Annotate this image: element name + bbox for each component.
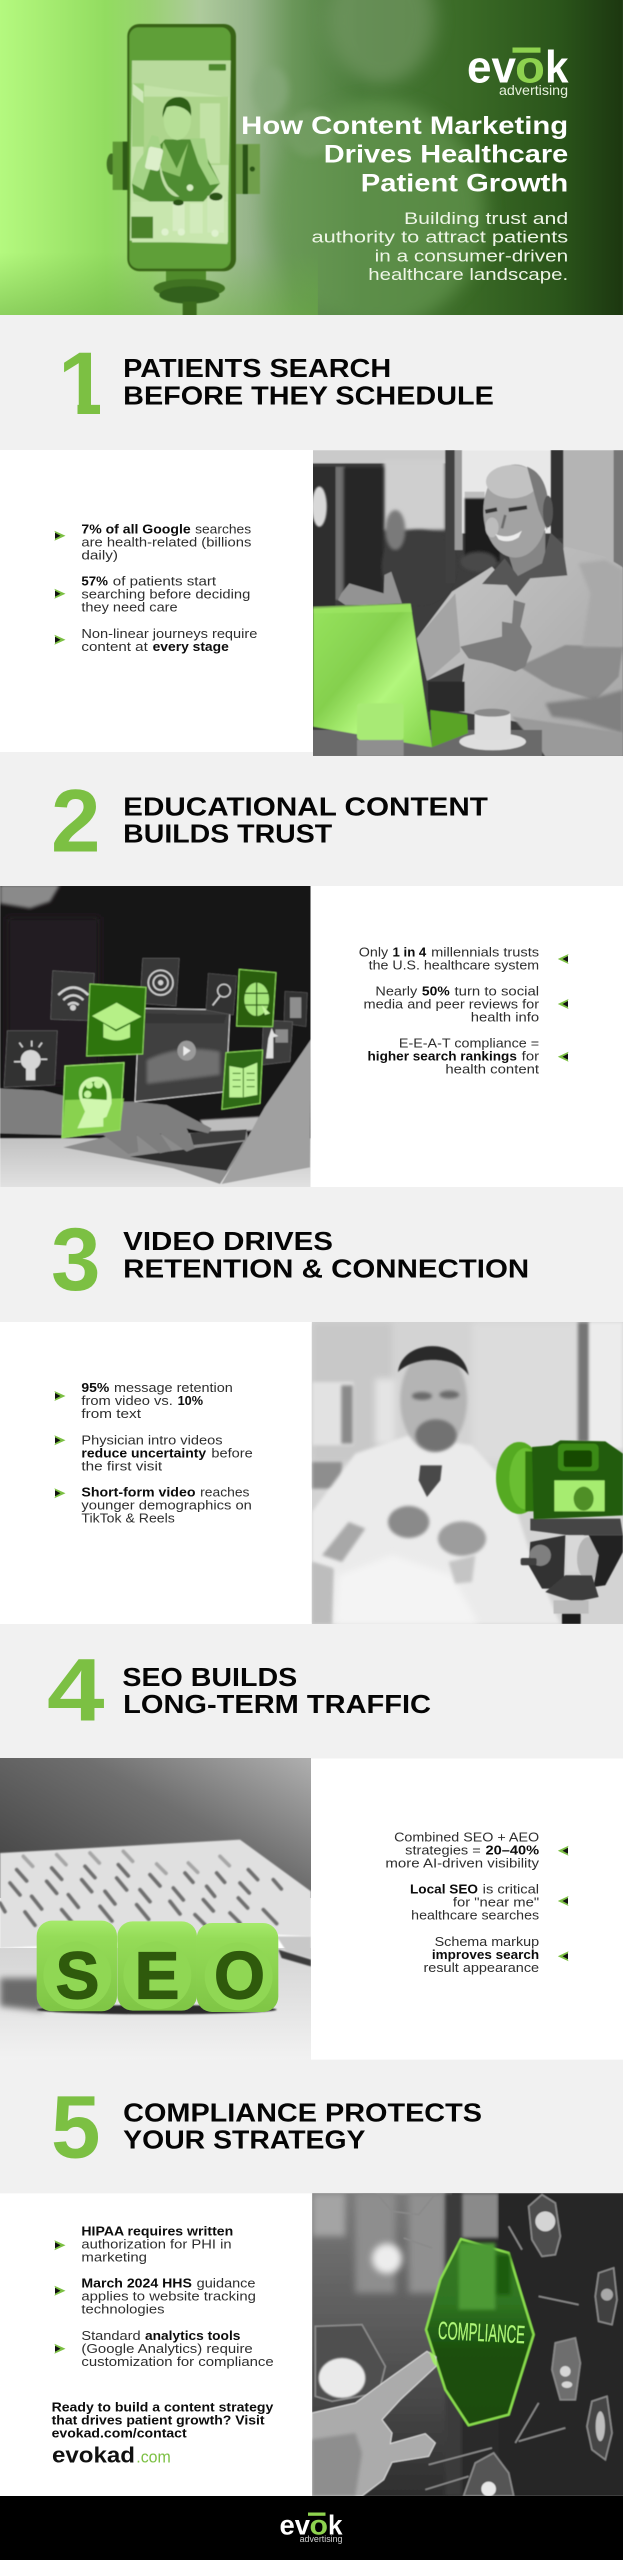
bullet 1.2: of patients start <box>113 574 217 589</box>
number 5: 5 <box>51 2076 100 2176</box>
bullet 1.1 <box>54 521 252 562</box>
hero subtitle: healthcare landscape. <box>368 265 568 284</box>
dark chair gap <box>428 682 465 712</box>
icon: head with gears <box>62 1063 124 1138</box>
bullet 3.2: reduce uncertainty <box>81 1445 207 1460</box>
bullet 3.1: 10% <box>178 1393 203 1408</box>
icon: wifi <box>51 971 94 1021</box>
phone screen <box>130 61 231 244</box>
bullet 4.3: Schema markup <box>435 1934 539 1949</box>
dice shadow <box>37 2005 277 2014</box>
bullet 2.2: media and peer reviews for <box>364 996 540 1011</box>
background tech shapes <box>315 2194 617 2496</box>
website wordmark <box>52 2443 171 2468</box>
bullet 3.2: before <box>211 1445 253 1460</box>
bullet 3.3 <box>54 1485 252 1526</box>
glass <box>357 703 404 740</box>
bullet 4.3 <box>424 1934 568 1975</box>
man sweater <box>417 547 623 756</box>
bullet 3.2 <box>54 1432 253 1473</box>
bullet 2.2: turn to social <box>454 983 539 998</box>
panel 4: text bullets <box>385 1829 568 1975</box>
hero subtitle: in a consumer-driven <box>375 246 568 265</box>
bullet 4.2: Local SEO <box>410 1882 478 1897</box>
phone stand <box>154 270 225 317</box>
bullet 4.2 <box>410 1882 568 1923</box>
open right hand <box>460 600 532 672</box>
bullet 5.2: March 2024 HHS <box>81 2276 192 2291</box>
green camera <box>496 1440 623 1519</box>
SEO lettering on dice: O <box>214 1938 265 2014</box>
bullet 2.3 <box>368 1036 568 1077</box>
laptop screen back <box>222 1039 311 1184</box>
icon: target <box>140 958 179 1006</box>
bullet 5.3: analytics tools <box>145 2328 240 2343</box>
bullet 2.2 <box>364 983 568 1024</box>
bullet 4.1: Combined SEO + AEO <box>394 1829 539 1844</box>
panel 1: photo of older man at green laptop <box>312 450 623 757</box>
panel 2: photo of hands on laptop with floating icons <box>0 883 313 1190</box>
panel 5: photo of finger pressing compliance hexagon <box>312 2193 623 2496</box>
bullet 2.1: the U.S. healthcare system <box>369 957 539 972</box>
hero subtitle: Building trust and <box>404 209 568 228</box>
section 3 header band <box>0 1187 623 1322</box>
bullet 3.3: TikTok & Reels <box>81 1511 175 1526</box>
SEO lettering on dice: E <box>134 1938 180 2014</box>
bullet 1.3 <box>54 626 257 654</box>
bullet 3.3: younger demographics on <box>81 1498 252 1513</box>
bullet 4.1: 20–40% <box>486 1842 540 1857</box>
icon: document <box>284 991 307 1027</box>
heading 3: RETENTION & CONNECTION <box>123 1253 529 1283</box>
SEO lettering on dice: S <box>56 1938 100 2014</box>
green laptop <box>313 604 432 747</box>
bullet 2.1 <box>359 944 568 972</box>
necktie <box>419 1465 442 1497</box>
bullet 1.3: content at <box>81 639 148 654</box>
footer bar <box>0 2496 623 2560</box>
hero banner <box>0 0 623 327</box>
panel 4: photo of SEO dice and keyboard <box>0 1758 313 2061</box>
call to action: evokad.com/contact <box>52 2425 187 2440</box>
bullet 1.3: every stage <box>153 639 229 654</box>
heading 4 <box>122 1662 431 1719</box>
head <box>483 464 547 558</box>
number 2: 2 <box>51 771 100 871</box>
hexagon lettering: COMPLIANCE <box>437 2317 526 2349</box>
bullet 2.3: for <box>522 1049 540 1064</box>
number 4: 4 <box>47 1640 105 1740</box>
bullet 4.2: healthcare searches <box>411 1908 540 1923</box>
hero title: Drives Healthcare <box>324 141 568 169</box>
bullet 5.2: applies to website tracking <box>81 2289 256 2304</box>
logo: evok advertising: k <box>545 42 569 92</box>
tripod <box>521 1519 623 1624</box>
footer logo: o <box>310 2509 328 2540</box>
website wordmark: evokad <box>52 2443 135 2468</box>
logo: evok advertising: ev <box>467 42 516 92</box>
number 1: 1 <box>58 333 108 433</box>
bullet 4.1: more AI-driven visibility <box>385 1856 540 1871</box>
bullet 3.3: Short-form video <box>81 1485 196 1500</box>
icon: globe <box>237 969 276 1027</box>
bullet 2.2: Nearly <box>375 983 418 998</box>
bullet 4.3: improves search <box>432 1947 539 1962</box>
bullet 1.3: Non-linear journeys require <box>81 626 257 641</box>
panel 2: text bullets <box>359 944 568 1077</box>
icon: graduation cap <box>87 984 146 1056</box>
bullet 5.3 <box>54 2328 274 2369</box>
nurse <box>132 97 220 202</box>
bullet 1.2: searching before deciding <box>81 587 250 602</box>
panel 5: text bullets <box>52 2223 274 2468</box>
bullet 5.1: authorization for PHI in <box>81 2236 232 2251</box>
heading 4: LONG-TERM TRAFFIC <box>123 1689 431 1719</box>
logo: evok advertising: advertising <box>499 82 568 98</box>
bullet 4.1: strategies = <box>405 1842 481 1857</box>
heading 2 <box>123 791 488 849</box>
panel 3: photo of blurred doctor and green camera <box>312 1322 623 1625</box>
footer logo: ev <box>280 2509 310 2540</box>
bullet 3.2: the first visit <box>81 1458 163 1473</box>
heading 2: EDUCATIONAL CONTENT <box>123 791 488 821</box>
bullet 4.2: for "near me" <box>453 1895 540 1910</box>
number 3: 3 <box>51 1209 100 1309</box>
bullet 1.2: they need care <box>81 600 178 615</box>
hero title: How Content Marketing <box>241 112 568 140</box>
doctor head <box>400 1349 467 1452</box>
raised left hand <box>338 572 402 605</box>
call to action: Ready to build a content strategy <box>52 2399 274 2414</box>
bullet 3.1 <box>54 1380 233 1421</box>
bullet 5.1: marketing <box>81 2249 147 2264</box>
bullet 2.3: health content <box>445 1062 540 1077</box>
table <box>312 730 542 757</box>
bullet 5.3: Standard <box>81 2328 141 2343</box>
bullet 5.1: HIPAA requires written <box>81 2223 233 2238</box>
heading 1 <box>123 353 494 411</box>
hero subtitle: authority to attract patients <box>312 228 568 247</box>
heading 2: BUILDS TRUST <box>123 819 332 849</box>
bullet 3.1: from text <box>81 1406 141 1421</box>
footer logo: k <box>328 2509 343 2540</box>
forearm and hand <box>0 1088 212 1154</box>
section 5 header band <box>0 2060 623 2193</box>
phone body <box>127 24 236 271</box>
heading 3 <box>123 1226 529 1283</box>
bullet 2.1: 1 in 4 <box>392 944 427 959</box>
SEO lettering on dice <box>56 1938 265 2014</box>
pointing hand <box>312 2351 436 2496</box>
footer logo: advertising <box>300 2534 342 2544</box>
coffee cup <box>459 733 526 750</box>
heading 4: SEO BUILDS <box>122 1662 297 1692</box>
bullet 2.3: E-E-A-T compliance = <box>399 1036 539 1051</box>
call to action: that drives patient growth? Visit <box>52 2412 265 2427</box>
bullet 2.1: Only <box>359 944 389 959</box>
bullet 5.1 <box>54 2223 233 2264</box>
hero subtitle <box>312 209 568 284</box>
bullet 4.1 <box>385 1829 568 1871</box>
logo: evok advertising <box>467 42 569 98</box>
video panel <box>135 1008 230 1102</box>
hero title: Patient Growth <box>361 169 568 197</box>
bullet 5.2: technologies <box>81 2302 165 2317</box>
bullet 1.1: daily) <box>81 547 118 562</box>
bullet 3.1: from video vs. <box>81 1393 173 1408</box>
heading 3: VIDEO DRIVES <box>123 1226 333 1256</box>
icon: light bulb <box>4 1031 57 1087</box>
bullet 5.2: guidance <box>197 2276 256 2291</box>
bullet 3.1: message retention <box>114 1380 233 1395</box>
bullet 3.1: 95% <box>81 1380 110 1395</box>
bullet 5.3: customization for compliance <box>81 2354 274 2369</box>
bullet 2.2: health info <box>471 1009 539 1024</box>
section 1 header band <box>0 315 623 450</box>
website wordmark: .com <box>136 2448 171 2467</box>
bullet 2.1: millennials trusts <box>431 944 540 959</box>
bullet 1.1: searches <box>195 521 252 536</box>
icon: magnifier <box>206 973 237 1015</box>
bullet 3.2: Physician intro videos <box>81 1432 223 1447</box>
neck and collar <box>508 530 546 576</box>
laptop base <box>63 1131 248 1184</box>
bullet 1.2 <box>54 574 250 615</box>
panel 1: text bullets <box>54 521 257 654</box>
doctor coat <box>312 1435 560 1624</box>
bullet 4.2: is critical <box>483 1882 539 1897</box>
green hexagon <box>426 2239 534 2425</box>
heading 5: YOUR STRATEGY <box>123 2125 366 2155</box>
bullet 2.3: higher search rankings <box>368 1049 517 1064</box>
panel 3: text bullets <box>54 1380 253 1526</box>
bullet 1.1: are health-related (billions <box>81 534 252 549</box>
phone clamps <box>107 142 260 194</box>
hero photo: phone filming nurse, green duotone <box>0 0 623 327</box>
call to action <box>52 2399 274 2440</box>
keyboard <box>0 1840 311 1948</box>
bullet 5.2 <box>54 2276 256 2317</box>
doctor hands <box>388 1506 429 1538</box>
hero title <box>241 112 568 197</box>
footer logo <box>280 2509 343 2544</box>
bullet 3.3: reaches <box>200 1485 250 1500</box>
icon: open book <box>222 1050 263 1109</box>
heading 5: COMPLIANCE PROTECTS <box>123 2097 482 2127</box>
bullet 5.3: (Google Analytics) require <box>81 2341 253 2356</box>
section 4 header band <box>0 1624 623 1758</box>
section 2 header band <box>0 752 623 886</box>
heading 1: PATIENTS SEARCH <box>123 353 391 383</box>
green dice <box>37 1921 278 2012</box>
icon: presenter <box>262 1020 293 1065</box>
bullet 4.3: result appearance <box>424 1960 539 1975</box>
logo: evok advertising: o <box>515 42 545 92</box>
bullet 1.1: 7% of all Google <box>81 521 191 536</box>
heading 5 <box>123 2097 482 2155</box>
bullet 1.2: 57% <box>81 574 108 589</box>
heading 1: BEFORE THEY SCHEDULE <box>123 381 494 411</box>
bullet 2.2: 50% <box>422 983 450 998</box>
